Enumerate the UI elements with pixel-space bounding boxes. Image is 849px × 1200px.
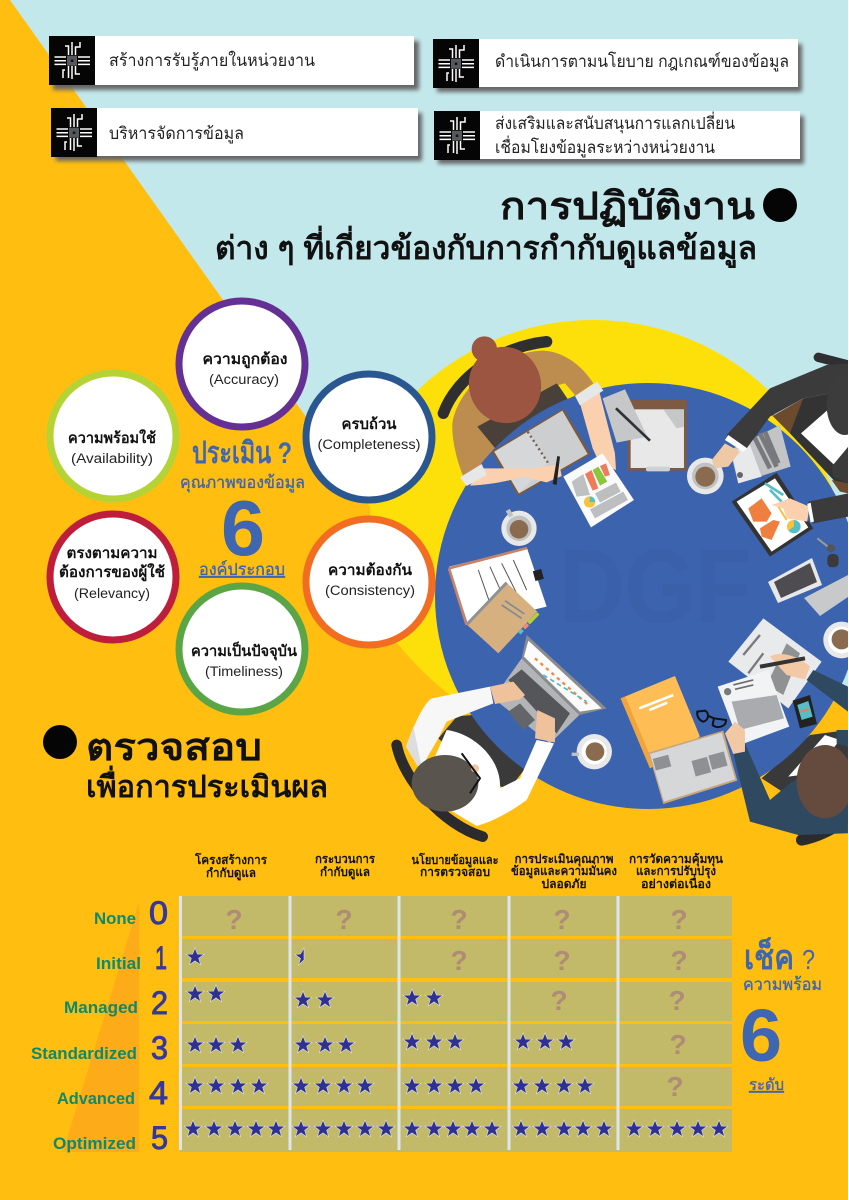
items and arms, upper half	[460, 336, 849, 567]
unknown markers: ?	[450, 945, 468, 976]
side callout: check readiness, 6 levels: ระดับ	[749, 1077, 784, 1094]
maturity level labels: Advanced	[57, 1089, 135, 1108]
circle: completeness	[306, 374, 432, 500]
practice item: data exchange: ส่งเสริมและสนับสนุนการแลกเปลี่ยน	[495, 111, 735, 134]
maturity table	[179, 896, 732, 1152]
man top right paper	[730, 425, 791, 483]
maturity level numbers: 4	[149, 1075, 168, 1111]
unknown markers	[225, 904, 688, 1102]
unknown markers: ?	[550, 985, 568, 1016]
document pad	[449, 548, 547, 625]
circle: availability	[50, 373, 176, 499]
column headings: ข้อมูลและความมั่นคง	[511, 862, 617, 879]
coffee cup centre left	[501, 509, 537, 546]
column headings: ปลอดภัย	[542, 877, 586, 891]
side callout: check readiness, 6 levels: 6	[740, 994, 782, 1077]
man top right suit and arm	[712, 363, 849, 483]
side callout: check readiness, 6 levels: ความพร้อม	[743, 975, 822, 994]
centre text: assess data quality, 6 components: องค์ประกอบ	[199, 560, 285, 579]
circle: availability: (Availability)	[71, 451, 153, 466]
centre text: assess data quality, 6 components: 6	[221, 484, 265, 572]
title: practices	[215, 186, 797, 269]
maturity level labels: Initial	[96, 954, 141, 973]
circle: relevancy: (Relevancy)	[74, 586, 150, 601]
round blue table	[435, 383, 849, 809]
circle: timeliness: ความเป็นปัจจุบัน	[191, 641, 298, 661]
circle: relevancy: ตรงตามความ	[66, 545, 158, 562]
circle: accuracy: ความถูกต้อง	[202, 351, 288, 369]
tablet	[732, 473, 813, 557]
title: assessment: ตรวจสอบ	[86, 727, 262, 769]
side callout: check readiness, 6 levels: เช็ค	[744, 936, 794, 977]
maturity level labels: None	[94, 909, 136, 928]
unknown markers: ?	[669, 1029, 687, 1060]
glasses	[697, 711, 726, 727]
tan notebook	[467, 583, 538, 653]
watermark: DGF	[559, 529, 751, 645]
circle: consistency	[306, 519, 432, 645]
side callout: check readiness, 6 levels	[740, 936, 822, 1094]
man top right pointing hand	[772, 493, 848, 523]
practice item: awareness: สร้างการรับรู้ภายในหน่วยงาน	[109, 50, 315, 71]
unknown markers: ?	[668, 985, 686, 1016]
report with chart	[563, 453, 634, 527]
maturity level numbers: 1	[155, 940, 167, 976]
circle: completeness: (Completeness)	[318, 437, 420, 452]
column headings: การวัดความคุ้มทุน	[629, 852, 724, 867]
circle: relevancy: ต้องการของผู้ใช้	[59, 563, 165, 582]
column headings: การประเมินคุณภาพ	[514, 852, 614, 867]
title: assessment	[43, 725, 328, 804]
coffee cup right	[823, 622, 849, 658]
circle: timeliness: (Timeliness)	[205, 664, 283, 679]
practice item: data exchange	[434, 111, 804, 164]
smartphone white	[768, 558, 822, 603]
practice item: data management	[51, 108, 422, 161]
practice item: data management: บริหารจัดการข้อมูล	[109, 124, 244, 144]
title: practices: การปฏิบัติงาน	[500, 186, 755, 228]
coffee cup lower	[572, 734, 612, 769]
woman arms	[460, 382, 616, 486]
maturity level labels: Optimized	[53, 1134, 136, 1153]
practice item: policy compliance	[433, 39, 802, 92]
laptop	[493, 635, 607, 743]
circle: accuracy	[179, 301, 305, 427]
unknown markers: ?	[670, 945, 688, 976]
coffee cup near clipboard	[687, 458, 724, 494]
centre text: assess data quality, 6 components: คุณภาพของข้อมูล	[180, 473, 305, 493]
column headings: กำกับดูแล	[206, 866, 256, 881]
maturity level labels: Standardized	[31, 1044, 137, 1063]
smartphone dark	[793, 695, 817, 728]
maturity level numbers	[149, 895, 168, 1156]
column headings: อย่างต่อเนื่อง	[641, 875, 711, 891]
unknown markers: ?	[553, 904, 571, 935]
column headings: นโยบายข้อมูลและ	[412, 852, 498, 868]
column dividers	[179, 896, 620, 1150]
man bottom left head	[412, 753, 480, 812]
maturity level numbers: 2	[151, 985, 168, 1021]
practice item: awareness	[49, 36, 419, 90]
title: practices: ต่าง ๆ ที่เกี่ยวข้องกับการกำกับดูแลข้อมูล	[215, 225, 757, 269]
open magazine	[648, 731, 737, 804]
data quality wheel	[50, 301, 432, 712]
circle: timeliness	[179, 586, 305, 712]
maturity level numbers: 5	[151, 1120, 168, 1156]
background: yellow circle behind table	[339, 320, 847, 828]
unknown markers: ?	[225, 904, 243, 935]
circle: completeness: ครบถ้วน	[342, 416, 397, 433]
envelope	[804, 575, 848, 616]
man bottom right arms	[725, 654, 848, 835]
clipboard	[603, 389, 687, 471]
star ratings	[184, 948, 728, 1137]
woman body and chair	[443, 342, 593, 477]
circle: relevancy	[50, 514, 176, 640]
unknown markers: ?	[666, 1071, 684, 1102]
column headings: และการปรับปรุง	[636, 864, 716, 879]
circle: consistency: (Consistency)	[325, 583, 415, 598]
man top right body	[772, 357, 848, 493]
table rows	[180, 896, 732, 1152]
column headings: กำกับดูแล	[320, 865, 370, 880]
circle: availability: ความพร้อมใช้	[68, 429, 156, 447]
circle: accuracy: (Accuracy)	[209, 372, 279, 387]
man bottom right hair	[797, 745, 849, 818]
practice item: data exchange: เชื่อมโยงข้อมูลระหว่างหน่วยงาน	[495, 135, 715, 158]
column headings	[194, 852, 724, 891]
maturity level labels: Managed	[64, 998, 138, 1017]
unknown markers: ?	[450, 904, 468, 935]
title: assessment: เพื่อการประเมินผล	[86, 765, 328, 804]
man bottom right body	[762, 730, 848, 840]
maturity triangle	[63, 903, 139, 1152]
unknown markers: ?	[335, 904, 353, 935]
column headings: การตรวจสอบ	[420, 865, 490, 879]
column headings: กระบวนการ	[315, 852, 376, 866]
man bottom left body	[397, 712, 527, 837]
man bottom left shirt	[406, 682, 555, 826]
centre text: assess data quality, 6 components: ประเมิน ?	[192, 437, 292, 470]
circle: consistency: ความต้องกัน	[328, 562, 413, 579]
woman hair	[460, 336, 550, 431]
maturity level numbers: 3	[151, 1030, 168, 1066]
orange book	[621, 676, 700, 768]
open notebook	[492, 408, 591, 496]
items and arms, lower half	[406, 548, 849, 835]
side callout: check readiness, 6 levels: ?	[802, 944, 815, 975]
papers with pen	[718, 618, 822, 745]
unknown markers: ?	[553, 945, 571, 976]
column headings: โครงสร้างการ	[194, 852, 268, 867]
practice item: policy compliance: ดำเนินการตามนโยบาย กฎเกณฑ์ของข้อมูล	[495, 51, 789, 72]
maturity level numbers: 0	[149, 895, 168, 931]
unknown markers: ?	[670, 904, 688, 935]
car keys	[817, 538, 839, 567]
maturity level labels	[31, 909, 141, 1153]
illustration: people around a table	[397, 336, 849, 840]
centre text: assess data quality, 6 components	[180, 437, 305, 579]
right edge stripe	[848, 0, 849, 1200]
